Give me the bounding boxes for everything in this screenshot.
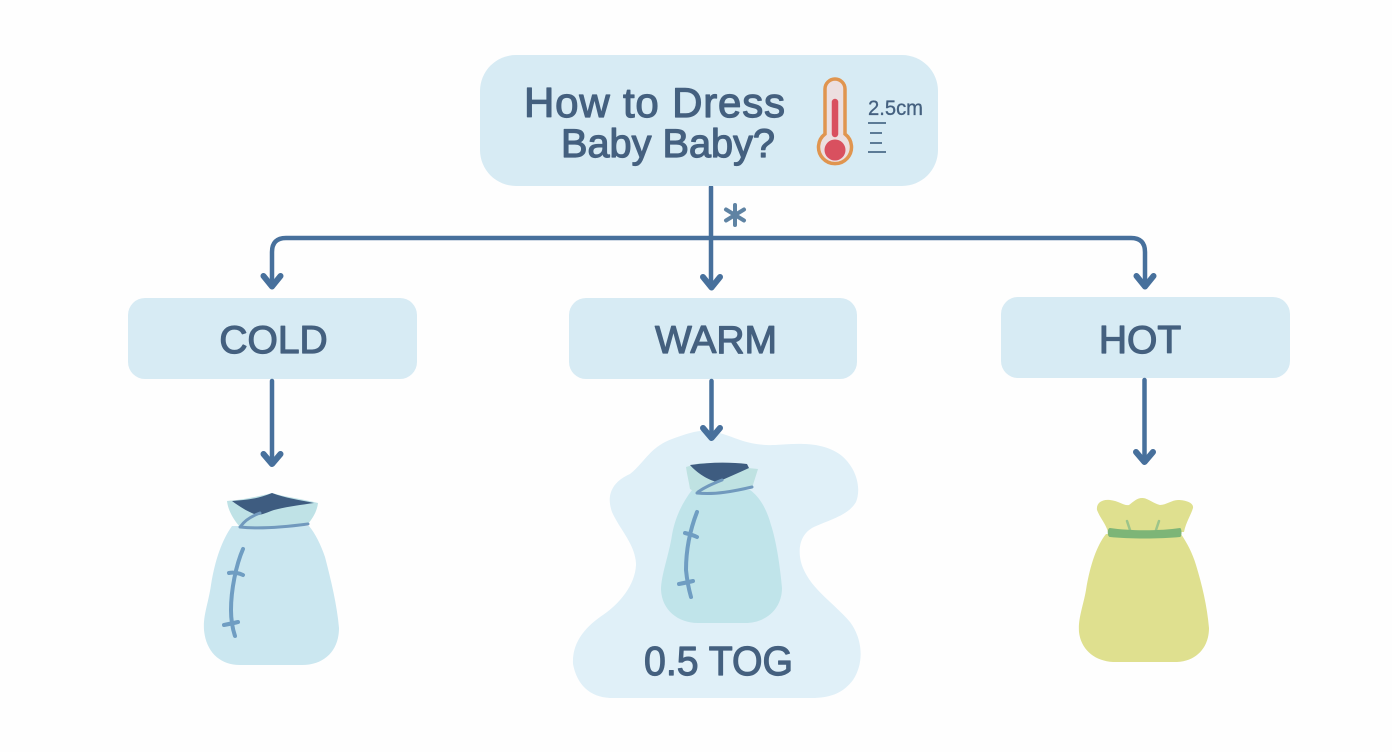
warm label: WARM	[655, 319, 777, 362]
arrow: hot to bag	[1136, 380, 1153, 462]
title text: How to Dress	[524, 79, 785, 126]
hot label: HOT	[1099, 319, 1181, 362]
cold label: COLD	[219, 319, 328, 362]
thermometer scale: 2.5cm	[868, 97, 923, 120]
icon: snowflake asterisk	[726, 205, 744, 225]
panel: warm	[569, 298, 857, 379]
panel: hot	[1001, 297, 1290, 378]
warm blob background	[573, 431, 861, 698]
title box	[480, 55, 938, 186]
icon: hot sleep sack	[1079, 498, 1209, 662]
arrow: warm to bag	[703, 381, 720, 438]
icon: warm sleep sack	[661, 463, 782, 623]
warm tog label: 0.5 TOG	[644, 638, 793, 684]
icon: cold sleep sack	[204, 493, 339, 665]
panel: cold	[128, 298, 417, 379]
icon: thermometer	[819, 79, 852, 164]
connector arrows: top branch	[264, 187, 1154, 288]
arrow: cold to bag	[264, 381, 280, 464]
title text second line: Baby Baby?	[561, 122, 775, 166]
thermometer scale	[868, 97, 923, 152]
